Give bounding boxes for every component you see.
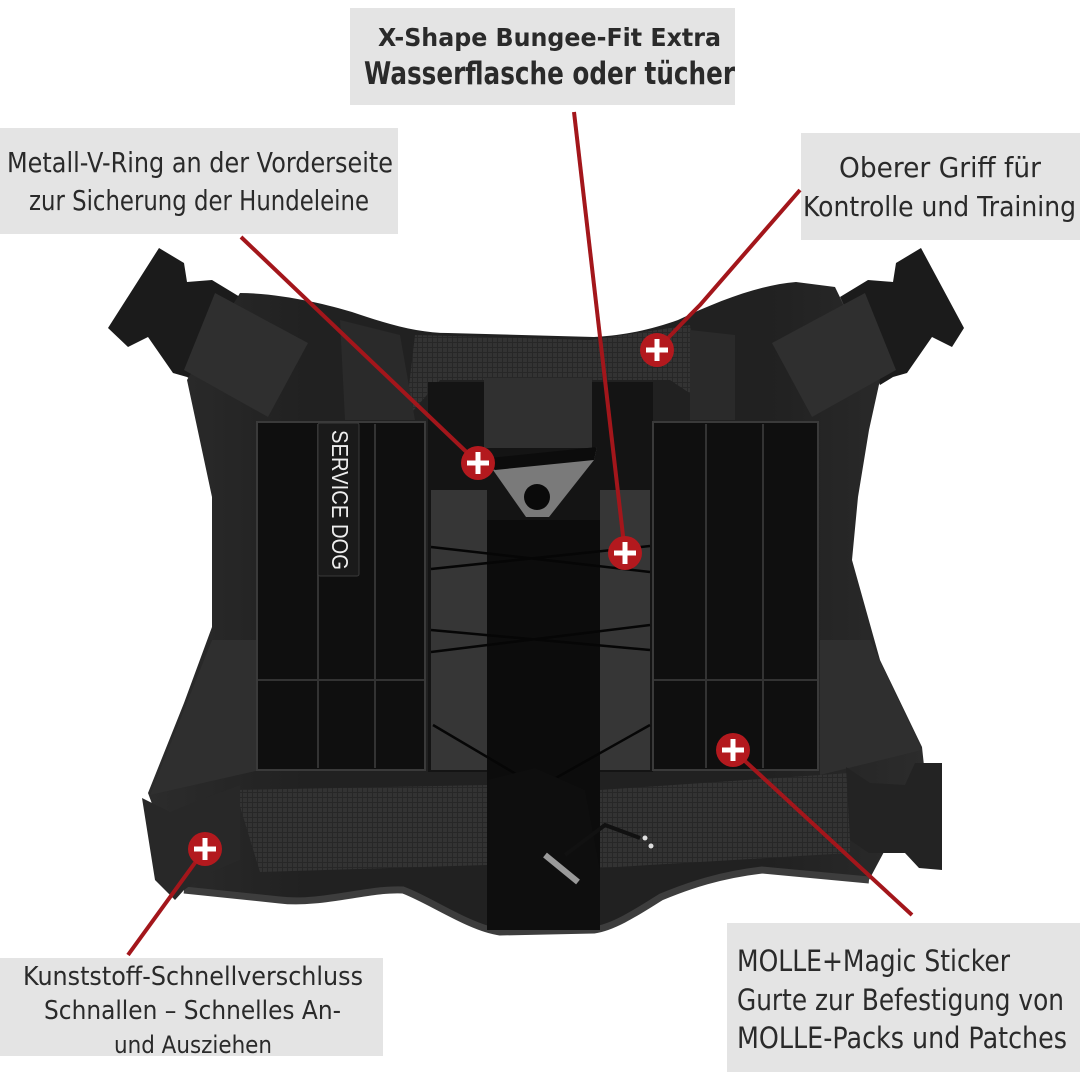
arrow: molle leader <box>733 750 912 915</box>
lower side shading right <box>820 640 922 775</box>
handle side straps <box>340 320 415 420</box>
top handle <box>405 325 700 420</box>
lower side shading left <box>150 640 260 795</box>
service dog patch: SERVICE DOG <box>327 430 353 570</box>
arrow: buckle leader <box>128 849 205 955</box>
centre side panels <box>431 490 487 770</box>
arrow: v-ring leader <box>241 237 478 463</box>
left panel seams <box>258 424 424 768</box>
right waist buckle <box>846 763 942 870</box>
centre flap <box>487 768 600 930</box>
panel: bungee label: X-Shape Bungee-Fit Extra <box>378 23 721 52</box>
cord lock <box>545 825 654 882</box>
icon: plus marker molle <box>716 733 750 767</box>
right velcro panel <box>653 422 818 770</box>
right panel seams <box>654 424 817 768</box>
bungee cords <box>431 546 650 815</box>
left shoulder webbing patch <box>184 293 308 417</box>
icon: plus marker buckle <box>188 832 222 866</box>
icon: plus marker handle <box>640 333 674 367</box>
panel: bungee label: Wasserflasche oder tücher <box>364 56 736 92</box>
service dog patch <box>318 423 359 576</box>
left velcro panel <box>257 422 425 770</box>
icon: plus marker v-ring <box>461 446 495 480</box>
icon: plus marker bungee <box>608 536 642 570</box>
panel: v-ring label <box>0 128 398 234</box>
right shoulder buckle <box>840 248 964 385</box>
panel: molle label: MOLLE+Magic Sticker <box>737 944 1010 978</box>
centre opening <box>428 382 653 772</box>
right shoulder webbing patch <box>772 293 896 417</box>
panel: handle label: Oberer Griff für <box>839 151 1041 184</box>
arrow: handle leader <box>657 190 800 350</box>
panel: bungee label <box>350 8 736 105</box>
panel: v-ring label: zur Sicherung der Hundeleine <box>29 184 369 217</box>
left shoulder buckle <box>108 248 240 385</box>
panel: buckle label <box>0 958 383 1059</box>
harness body <box>148 282 925 932</box>
centre spine <box>487 520 600 930</box>
panel: molle label <box>727 923 1080 1072</box>
panel: buckle label: Kunststoff-Schnellverschluss <box>23 962 363 992</box>
harness photo illustration <box>108 248 964 932</box>
panel: buckle label: Schnallen – Schnelles An- <box>44 996 341 1026</box>
panel: buckle label: und Ausziehen <box>114 1031 272 1059</box>
arrow: bungee leader <box>574 112 625 553</box>
metal v-ring <box>490 447 597 517</box>
panel: v-ring label: Metall-V-Ring an der Vorderseite <box>7 146 393 179</box>
panel: handle label <box>801 133 1080 240</box>
webbing loop <box>484 378 592 448</box>
bottom hem <box>184 870 869 932</box>
left waist buckle <box>142 785 240 900</box>
waist strap <box>235 785 487 872</box>
